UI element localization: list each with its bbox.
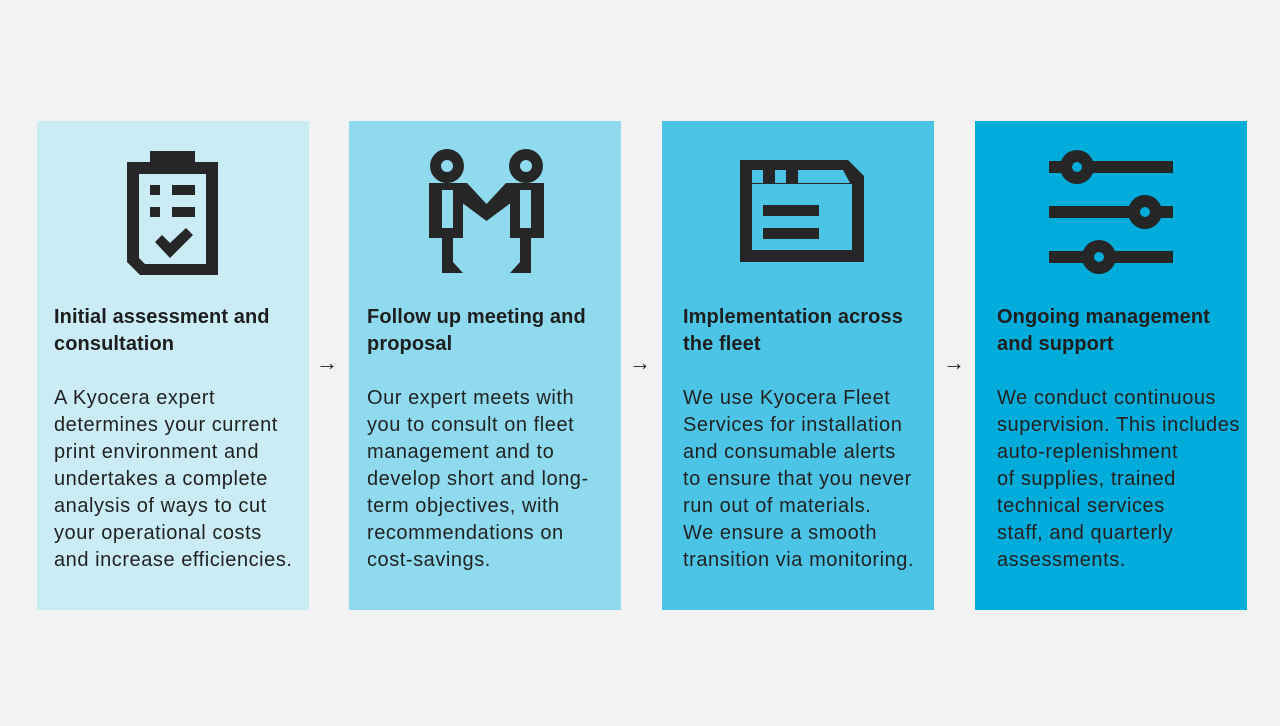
text: step 3: Services for installation [683,414,902,436]
text: step 4 [997,387,1240,571]
text: step 1: A Kyocera expert [54,387,215,409]
text: step 3: We use Kyocera Fleet [683,387,890,409]
text: step 4: of supplies, trained [997,468,1176,490]
icon: clipboard [127,151,218,275]
text: step 1: print environment and [54,441,259,463]
arrow 2: → [629,350,651,375]
heading: step 2 [367,306,586,355]
arrow 3: → [943,350,965,375]
heading: step 1 [54,306,270,355]
text: step 4: auto-replenishment [997,441,1178,463]
heading: step 4: and support [997,333,1114,355]
text: step 3: and consumable alerts [683,441,896,463]
text: step 2: Our expert meets with [367,387,574,409]
text: step 2: management and to [367,441,554,463]
text: step 2: term objectives, with [367,495,560,517]
panel: step 2 [349,121,621,610]
text: step 1: and increase efficiencies. [54,549,293,571]
heading: step 4 [997,306,1210,355]
text: step 1: your operational costs [54,522,262,544]
text: step 4: supervision. This includes [997,414,1240,436]
text: step 4: assessments. [997,549,1126,571]
heading: step 1: consultation [54,333,174,355]
text: step 3: We ensure a smooth [683,522,877,544]
text: step 2: develop short and long- [367,468,589,490]
text: step 1: analysis of ways to cut [54,495,267,517]
text: step 4: staff, and quarterly [997,522,1173,544]
panel: step 3 [662,121,934,610]
text: step 1 [54,387,293,571]
text: step 2: you to consult on fleet [367,414,574,436]
heading: step 3: the fleet [683,333,761,355]
icon: two people meeting [429,149,544,273]
text: step 3: to ensure that you never [683,468,912,490]
text: step 2: recommendations on [367,522,564,544]
arrow 1: → [316,350,338,375]
heading: step 2: Follow up meeting and [367,306,586,328]
text: step 4: technical services [997,495,1165,517]
heading: step 3 [683,306,903,355]
panel: step 4 [975,121,1247,610]
text: step 2 [367,387,589,571]
text: step 3: transition via monitoring. [683,549,914,571]
icon: sliders [1049,150,1173,274]
text: step 3 [683,387,914,571]
heading: step 4: Ongoing management [997,306,1210,328]
text: step 4: We conduct continuous [997,387,1216,409]
text: step 1: undertakes a complete [54,468,268,490]
text: step 2: cost-savings. [367,549,491,571]
text: step 3: run out of materials. [683,495,871,517]
icon: browser window [740,160,864,262]
panel: step 1 [37,121,309,610]
heading: step 1: Initial assessment and [54,306,270,328]
text: step 1: determines your current [54,414,278,436]
heading: step 3: Implementation across [683,306,903,328]
heading: step 2: proposal [367,333,452,355]
